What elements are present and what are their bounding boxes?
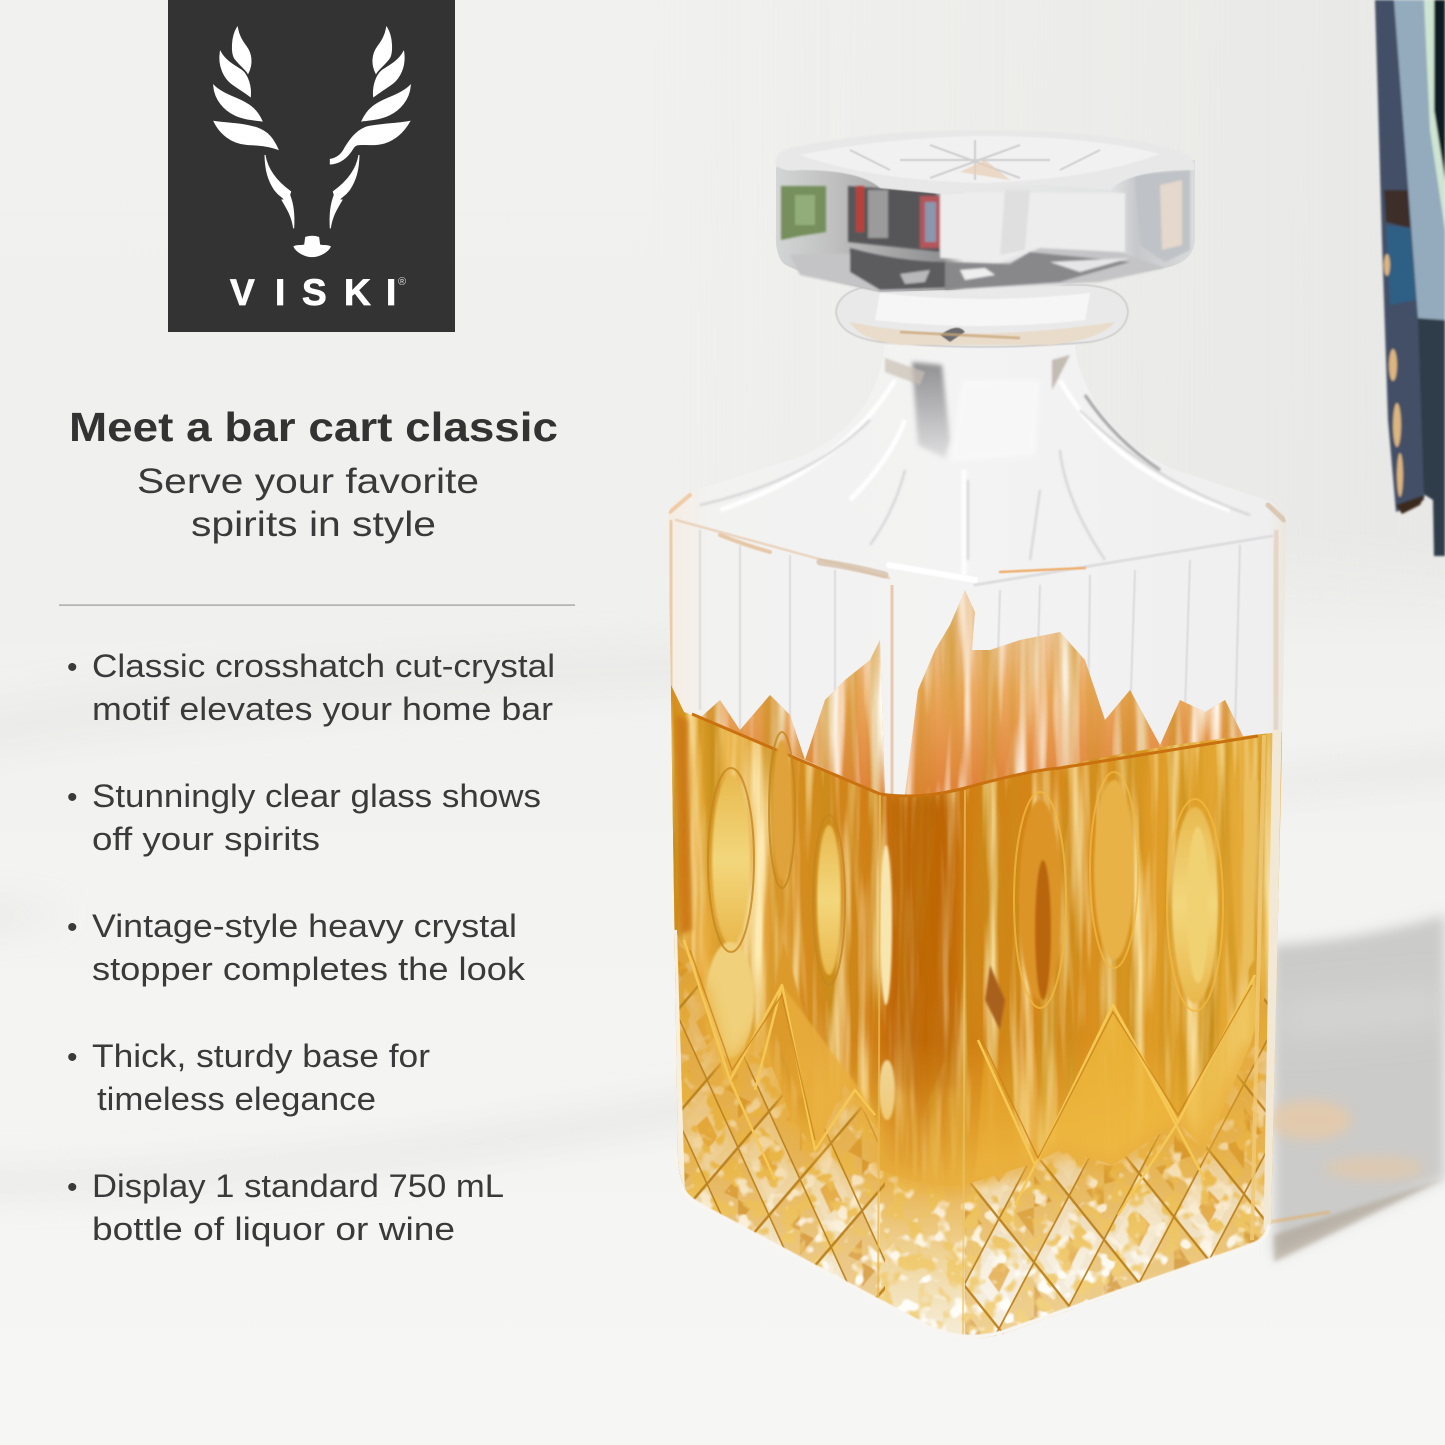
subheading xyxy=(137,462,479,544)
stopper xyxy=(776,130,1195,292)
liquid surface line xyxy=(692,714,1258,796)
liquid: left face xyxy=(671,685,880,1194)
decanter xyxy=(660,130,1300,1350)
icon: stag antler logo xyxy=(214,27,410,257)
base: chamfer xyxy=(880,1177,965,1334)
right outer glass wall xyxy=(1252,735,1264,1240)
headline: Meet a bar cart classic xyxy=(69,404,558,450)
bullet: crystal stopper: Vintage-style heavy crystal xyxy=(92,908,517,944)
left outer glass wall xyxy=(674,930,682,1195)
decanter glass body xyxy=(660,340,1300,1350)
centre and right-face cut ovals xyxy=(879,780,1258,1120)
base: lattice cut lines xyxy=(679,985,885,1298)
shoulder cuts xyxy=(720,380,1230,575)
bullet: crosshatch motif: • xyxy=(67,651,78,684)
pointed zig-zag cuts xyxy=(684,940,1255,1215)
bullet: sturdy base: Thick, sturdy base for xyxy=(92,1038,430,1074)
back-wall flame reflections above the liquid xyxy=(690,585,1260,800)
stopper star-cut top xyxy=(776,130,1194,195)
shoulder lip xyxy=(670,495,1284,585)
logo wordmark: VISKI xyxy=(230,272,396,313)
collar ring below the stopper xyxy=(836,285,1128,347)
bullet: crystal stopper: • xyxy=(67,911,78,944)
bullet: crosshatch motif xyxy=(67,648,555,727)
soft transition at the liquid line xyxy=(700,985,1250,1186)
liquid: centre chamfer xyxy=(880,790,965,1186)
bullet: capacity xyxy=(67,1168,504,1247)
bullet: crystal stopper: stopper completes the look xyxy=(92,951,526,987)
logo panel xyxy=(168,0,455,332)
bullet: crosshatch motif: motif elevates your home bar xyxy=(92,691,553,727)
liquid fade towards the clear base xyxy=(677,1056,1274,1210)
bullet: clear glass: • xyxy=(67,781,78,814)
bullet: clear glass xyxy=(67,778,541,857)
bullet: clear glass: off your spirits xyxy=(92,821,320,857)
photo background: wall and marble table xyxy=(244,8,1433,550)
bullet: sturdy base xyxy=(67,1038,430,1117)
bullet: crystal stopper xyxy=(67,908,526,987)
golden facets in the liquid xyxy=(719,977,1256,1167)
feature list xyxy=(67,648,555,1247)
neck shadow xyxy=(912,362,950,458)
base: right face lattice xyxy=(965,970,1275,1350)
registered mark: ® xyxy=(398,276,406,288)
bullet: capacity: • xyxy=(67,1171,78,1204)
vertical fluting upper xyxy=(699,530,1241,730)
base rim xyxy=(682,1188,1269,1337)
liquid: right face xyxy=(965,732,1282,1300)
bullet: clear glass: Stunningly clear glass shows xyxy=(92,778,541,814)
liquid vertical refraction streaks xyxy=(671,688,1282,1177)
subheading: spirits in style xyxy=(191,505,436,544)
stopper reflections xyxy=(781,170,1190,292)
subheading: Serve your favorite xyxy=(137,462,479,501)
book spine at top right xyxy=(1375,0,1445,556)
base: mottled facets xyxy=(679,964,1267,1338)
base: amber tint from above xyxy=(677,935,1268,1264)
bullet: capacity: bottle of liquor or wine xyxy=(92,1211,455,1247)
bullet: sturdy base: • xyxy=(67,1041,78,1074)
bullet: crosshatch motif: Classic crosshatch cut-crystal xyxy=(92,648,555,684)
base: left face lattice xyxy=(677,934,880,1298)
bullet: sturdy base: timeless elegance xyxy=(97,1081,376,1117)
divider xyxy=(59,604,575,606)
bullet: capacity: Display 1 standard 750 mL xyxy=(92,1168,504,1204)
cast shadow and amber caustics on the table xyxy=(1268,915,1445,1262)
left-face cut ovals xyxy=(676,715,841,1100)
facet edges xyxy=(878,795,880,1340)
clear crystal base xyxy=(670,920,1280,1350)
stopper side band xyxy=(776,160,1195,292)
